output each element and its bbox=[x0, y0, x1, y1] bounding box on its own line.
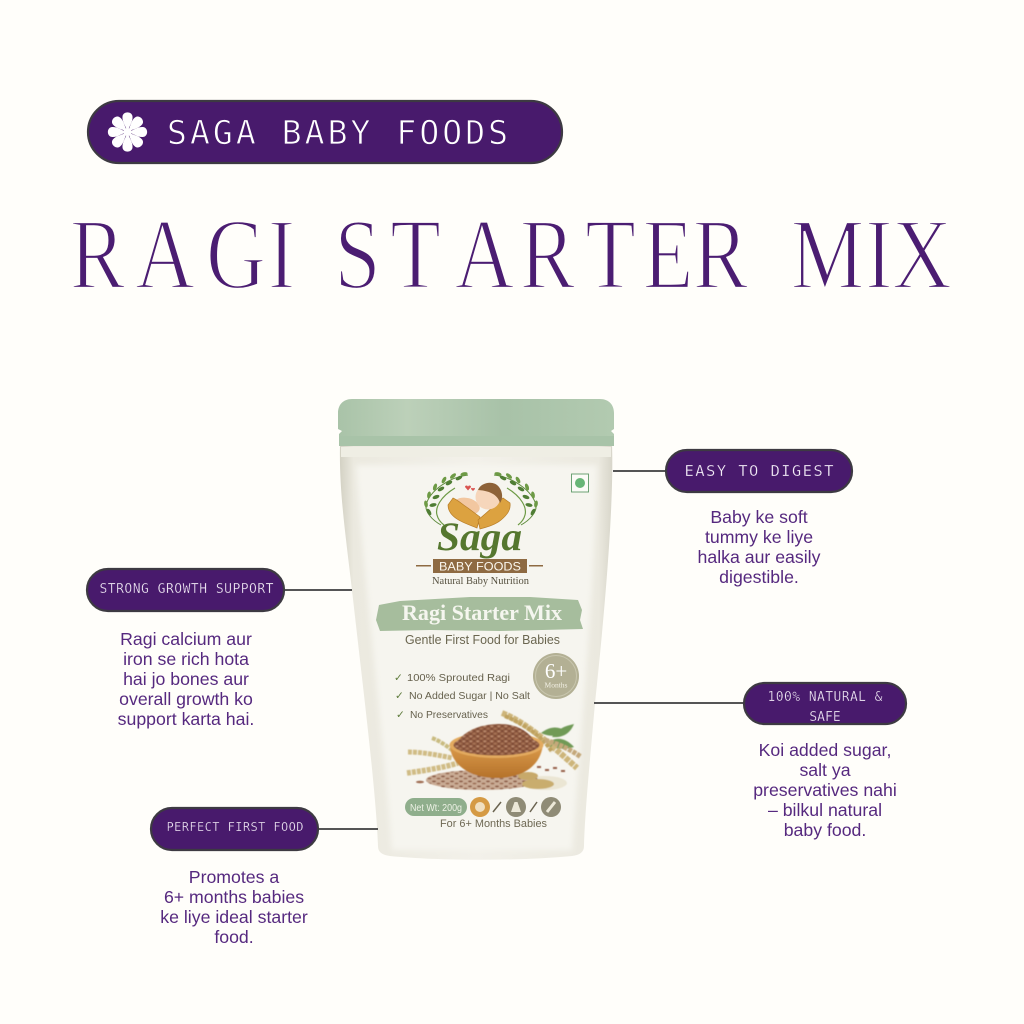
callout: easy to digest: EASY TO DIGEST bbox=[684, 462, 834, 480]
feature list: No Preservatives bbox=[410, 709, 488, 721]
callout: strong growth support bbox=[87, 569, 352, 729]
callout: strong growth support: STRONG GROWTH SUPPORT bbox=[100, 582, 274, 597]
illustration: ragi bowl and grains bbox=[407, 713, 581, 790]
subtitle: Gentle First Food for Babies bbox=[405, 633, 560, 647]
title: RAGI STARTER MIX bbox=[70, 198, 952, 310]
net weight pill bbox=[405, 798, 467, 816]
callout: strong growth support: hai jo bones aur bbox=[123, 669, 249, 689]
callout: natural and safe: preservatives nahi bbox=[753, 780, 897, 800]
callout: perfect first food: food. bbox=[214, 927, 254, 947]
wheat and leaves bbox=[541, 724, 574, 749]
icons: usage steps bbox=[470, 797, 561, 817]
callout: natural and safe: 100% NATURAL & bbox=[768, 690, 883, 705]
bowl bbox=[450, 744, 543, 778]
logo: laurels, baby and hands bbox=[424, 472, 538, 529]
icon: flower bbox=[108, 112, 147, 152]
feature list: 100% Sprouted Ragi bbox=[407, 672, 510, 684]
months badge: 6+ bbox=[545, 659, 567, 683]
product name band bbox=[376, 597, 583, 631]
callout: perfect first food: PERFECT FIRST FOOD bbox=[166, 820, 304, 834]
months badge: Months bbox=[545, 680, 568, 690]
baby foods band bbox=[416, 559, 543, 574]
months badge bbox=[533, 653, 579, 699]
tagline: Natural Baby Nutrition bbox=[432, 576, 529, 587]
callout: perfect first food bbox=[151, 808, 378, 947]
feature list bbox=[394, 672, 530, 721]
callout: natural and safe: SAFE bbox=[809, 710, 841, 725]
callout: natural and safe: baby food. bbox=[784, 820, 866, 840]
product pouch bbox=[338, 399, 614, 860]
logo wordmark: Saga bbox=[437, 514, 522, 559]
feature list: ✓ bbox=[395, 690, 404, 702]
net weight pill: Net Wt: 200g bbox=[410, 803, 462, 814]
baby foods band: BABY FOODS bbox=[439, 562, 521, 574]
callout: perfect first food: Promotes a bbox=[189, 867, 279, 887]
callout: easy to digest: tummy ke liye bbox=[705, 527, 813, 547]
brand name: SAGA BABY FOODS bbox=[167, 113, 508, 152]
icon: veg mark bbox=[572, 474, 588, 492]
product name band: Ragi Starter Mix bbox=[402, 600, 562, 625]
callout: strong growth support: support karta hai. bbox=[118, 709, 254, 729]
callout: natural and safe: salt ya bbox=[799, 760, 851, 780]
callout: natural and safe: – bilkul natural bbox=[768, 800, 882, 820]
pouch top seal bbox=[338, 399, 614, 446]
pouch body bbox=[340, 444, 612, 860]
feature list: ✓ bbox=[394, 672, 403, 684]
callout: natural and safe: Koi added sugar, bbox=[759, 740, 891, 760]
callout: strong growth support: overall growth ko bbox=[119, 689, 253, 709]
brand pill bbox=[88, 101, 562, 163]
feature list: No Added Sugar | No Salt bbox=[409, 690, 530, 702]
age note: For 6+ Months Babies bbox=[440, 818, 547, 830]
callout: natural and safe bbox=[594, 683, 906, 840]
callout: strong growth support: iron se rich hota bbox=[123, 649, 249, 669]
callout: easy to digest bbox=[613, 450, 852, 587]
seeds bbox=[426, 770, 538, 790]
callout: easy to digest: digestible. bbox=[719, 567, 799, 587]
callout: perfect first food: ke liye ideal starter bbox=[160, 907, 308, 927]
callout: perfect first food: 6+ months babies bbox=[164, 887, 304, 907]
callout: easy to digest: halka aur easily bbox=[698, 547, 821, 567]
callout: easy to digest: Baby ke soft bbox=[710, 507, 808, 527]
feature list: ✓ bbox=[396, 709, 405, 721]
callout: strong growth support: Ragi calcium aur bbox=[120, 629, 252, 649]
